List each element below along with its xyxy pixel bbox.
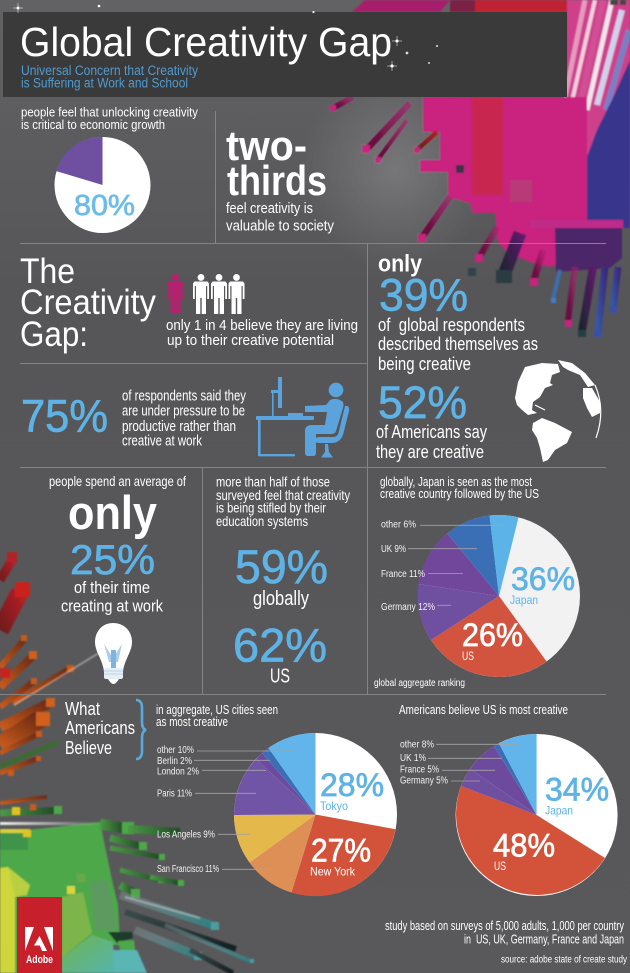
stat: only 39%: 39% <box>379 270 468 321</box>
panel: economic growth <box>21 105 198 233</box>
decoration: red and orange burst, left edge <box>0 552 74 815</box>
legend: cities pie labels <box>157 745 293 875</box>
text: Japan most creative: globally, Japan is seen as the most <box>380 475 532 489</box>
pie chart: 80% <box>54 137 150 233</box>
pie chart: US cities <box>234 733 397 896</box>
decoration: pink and blue burst, top right <box>300 0 630 337</box>
pie chart: global aggregate ranking: 26% <box>462 617 523 653</box>
subtitle: is Suffering at Work and School <box>21 76 188 90</box>
subtitle: Universal Concern that Creativity <box>21 63 198 78</box>
caption: global aggregate ranking: global aggregate ranking <box>374 678 465 689</box>
panel: education systems: more than half of those <box>216 474 330 490</box>
heading: What Americans Believe <box>65 699 135 758</box>
text: Japan most creative: creative country followed by the US <box>380 487 539 501</box>
heading: What Americans Believe: Believe <box>65 738 112 758</box>
text: cities heading <box>156 703 278 729</box>
panel: education systems: surveyed feel that creativity <box>216 487 350 503</box>
pie chart: Americans' ranking: 48% <box>493 828 555 864</box>
text: 1 in 4 <box>166 317 358 349</box>
legend: global pie labels <box>381 520 503 613</box>
panel: two-thirds: thirds <box>227 157 327 204</box>
pie chart: US cities: 28% <box>320 767 384 803</box>
panel: education systems: 62% <box>233 619 327 672</box>
heading: the creativity gap: Gap: <box>20 315 88 354</box>
heading: What Americans Believe: What <box>65 699 100 719</box>
stat: only 39% <box>378 251 538 374</box>
legend: cities pie labels: London 2% <box>157 766 199 777</box>
pie chart: global aggregate ranking: Japan <box>510 593 538 607</box>
text: cities heading: as most creative <box>156 715 228 729</box>
panel: time at work: 25% <box>70 536 155 583</box>
stat: only 39%: only <box>378 251 423 278</box>
heading: the creativity gap: Creativity <box>20 283 156 322</box>
panel: time at work <box>49 473 186 616</box>
panel: US cities <box>156 703 397 896</box>
icon: brace <box>136 700 146 759</box>
stat: only 39%: being creative <box>378 354 471 374</box>
stat: 52% of Americans <box>376 377 487 462</box>
legend: cities pie labels: Paris 11% <box>157 789 192 800</box>
pie chart: global aggregate ranking: 36% <box>511 561 575 597</box>
text: economic growth: is critical to economic growth <box>21 117 165 132</box>
legend: Americans pie labels <box>400 739 517 786</box>
panel: education systems: is being stifled by their <box>216 500 326 516</box>
stat: 75% under pressure: are under pressure to be <box>122 404 245 420</box>
pie chart: global aggregate ranking <box>418 515 580 677</box>
decoration: stars <box>13 3 438 71</box>
subtitle <box>21 63 198 90</box>
panel: education systems: 59% <box>235 540 328 593</box>
legend: global pie labels: UK 9% <box>381 544 406 555</box>
legend: Americans pie labels: France 5% <box>400 764 439 775</box>
logo: Adobe <box>17 897 62 973</box>
legend: global pie labels: Germany 12% <box>381 602 435 613</box>
stat: 75% under pressure <box>21 389 247 450</box>
panel: education systems: education systems <box>216 513 308 529</box>
legend: global pie labels: other 6% <box>381 520 416 531</box>
pie chart: US cities: Tokyo <box>320 799 348 813</box>
icon: globe <box>515 360 601 462</box>
heading: the creativity gap: The <box>20 252 75 291</box>
legend: cities pie labels: Los Angeles 9% <box>157 829 215 840</box>
title: Global Creativity Gap <box>20 19 392 65</box>
pie chart: Americans' ranking: 34% <box>545 772 609 808</box>
panel: education systems <box>216 474 350 688</box>
section dividers <box>0 111 606 694</box>
icon: person at desk <box>256 377 349 458</box>
text: economic growth <box>21 105 198 132</box>
icon: light bulb <box>95 623 132 684</box>
stat: 52% of Americans: 52% <box>378 377 467 428</box>
legend: global pie labels: France 11% <box>381 569 425 580</box>
stat: 75% under pressure: 75% <box>21 391 108 442</box>
text: Japan most creative <box>380 475 539 501</box>
logo: Adobe: Adobe <box>26 954 53 966</box>
text: cities heading: in aggregate, US cities seen <box>156 703 278 717</box>
stat: only 39%: of global respondents <box>378 315 525 335</box>
panel: time at work: people spend an average of <box>49 473 186 489</box>
text: 1 in 4: only 1 in 4 believe they are living <box>166 317 358 334</box>
stat: only 39%: described themselves as <box>378 334 538 354</box>
icon: four people, one highlighted <box>168 274 244 314</box>
text: 1 in 4: up to their creative potential <box>167 332 334 349</box>
stat: 52% of Americans: of Americans say <box>376 422 487 442</box>
decoration: green and teal blocks, bottom left <box>0 640 254 973</box>
panel: two-thirds: two- <box>226 122 307 169</box>
panel: global ranking <box>374 475 580 689</box>
panel: two-thirds: feel creativity is <box>226 200 313 217</box>
panel: Americans believe US <box>399 703 618 896</box>
title bar <box>3 12 567 97</box>
text: Americans heading: Americans believe US is most creative <box>399 703 568 717</box>
legend: Americans pie labels: Germany 5% <box>400 775 448 786</box>
legend: Americans pie labels: UK 1% <box>400 753 426 764</box>
panel: time at work: only <box>68 486 157 539</box>
pie chart: Americans' ranking <box>456 734 618 896</box>
pie chart: US cities: 27% <box>311 833 371 869</box>
stat: 52% of Americans: they are creative <box>376 442 484 462</box>
heading: the creativity gap <box>20 252 156 354</box>
heading: What Americans Believe: Americans <box>65 718 135 738</box>
panel: education systems: globally <box>253 588 309 610</box>
text: study note <box>385 919 625 946</box>
pie chart: Americans' ranking: Japan <box>545 803 573 817</box>
legend: cities pie labels: other 10% <box>157 745 194 756</box>
panel: time at work: of their time <box>74 578 150 597</box>
legend: cities pie labels: Berlin 2% <box>157 756 192 767</box>
pie chart: Americans' ranking: US <box>494 859 506 873</box>
stat: 75% under pressure: of respondents said they <box>122 389 247 405</box>
panel: two-thirds <box>226 122 334 235</box>
text: economic growth: people feel that unlocking creativity <box>21 105 198 120</box>
legend: Americans pie labels: other 8% <box>400 739 434 750</box>
panel: two-thirds: valuable to society <box>226 218 334 235</box>
pie chart: global aggregate ranking: US <box>462 649 474 663</box>
stat: 75% under pressure: creative at work <box>122 434 203 450</box>
pie chart: 80%: 80% <box>74 190 135 222</box>
panel: time at work: creating at work <box>61 597 163 616</box>
pie chart: US cities: New York <box>310 864 356 878</box>
legend: cities pie labels: San Francisco 11% <box>157 864 219 875</box>
stat: 75% under pressure: productive rather than <box>122 419 236 435</box>
panel: education systems: US <box>270 666 290 688</box>
